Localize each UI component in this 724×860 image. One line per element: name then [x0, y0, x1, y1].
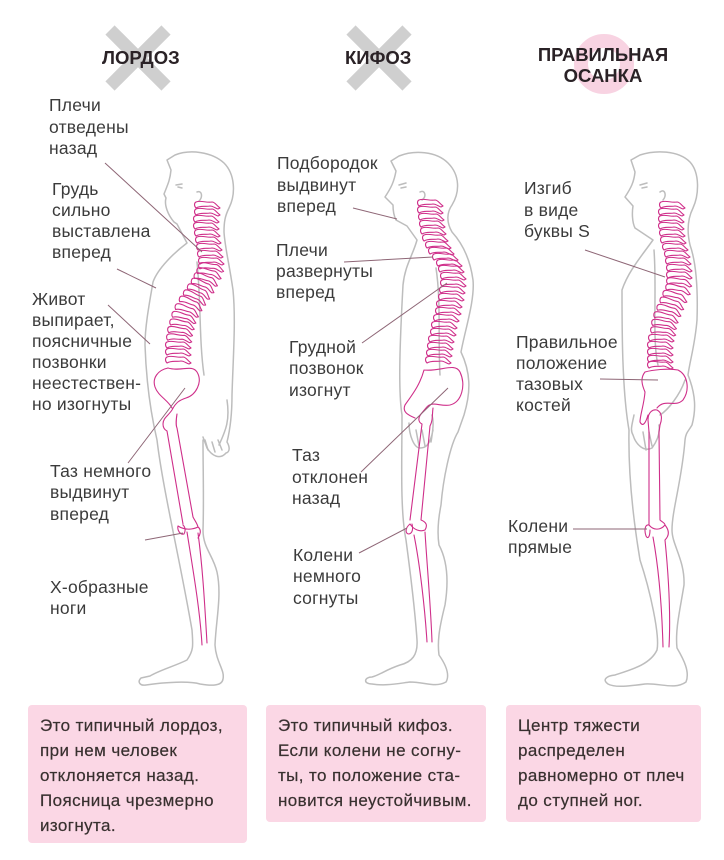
label: shoulders forward: развернуты: [276, 261, 373, 281]
callout: kyphosis: [266, 705, 486, 822]
callout: correct posture: распределен: [518, 741, 625, 760]
leader lines: kyphosis: [344, 208, 448, 553]
body silhouette: kyphosis: [366, 152, 473, 685]
label: pelvis position: положение: [516, 353, 607, 373]
spine: kyphosis: [418, 199, 466, 364]
silhouette details: correct posture face and arm: [631, 183, 685, 450]
label: shoulders forward: вперед: [276, 282, 335, 302]
label: pelvis back: отклонен: [292, 467, 368, 487]
label: S-curve: буквы S: [524, 221, 590, 241]
label: thoracic vertebra: изогнут: [289, 380, 351, 400]
label: belly: Живот: [32, 289, 86, 309]
label: chin forward: Подбородок: [277, 153, 378, 173]
label: pelvis forward: вперед: [50, 504, 109, 524]
label: pelvis position: Правильное: [516, 332, 618, 352]
label: pelvis back: Таз: [292, 445, 320, 465]
label: belly: неестествен-: [32, 373, 141, 393]
panel: kyphosis: [266, 30, 486, 822]
label: pelvis position: тазовых: [516, 374, 583, 394]
label: knees bent: Колени: [293, 545, 353, 565]
leader lines: lordosis: [105, 163, 202, 540]
label: shoulders back: назад: [49, 138, 97, 158]
label: pelvis position: костей: [516, 395, 571, 415]
silhouette details: lordosis face and arm: [176, 184, 222, 452]
callout: lordosis: изогнута.: [40, 816, 116, 835]
label: chest forward: Грудь: [52, 179, 99, 199]
label: chin forward: вперед: [277, 196, 336, 216]
body silhouette: correct posture: [605, 152, 698, 686]
callout: correct posture: равномерно от плеч: [518, 766, 685, 785]
label: pelvis forward: выдвинут: [50, 482, 129, 502]
leader lines: correct posture: [573, 250, 665, 529]
label: shoulders forward: Плечи: [276, 240, 328, 260]
panel: lordosis: [28, 30, 247, 843]
callout: kyphosis: ты, то положение ста-: [278, 766, 460, 785]
label: x-legs: Х-образные: [50, 577, 149, 597]
label: S-curve: Изгиб: [524, 178, 572, 198]
label: belly: позвонки: [32, 352, 107, 372]
spine: lordosis: [166, 201, 224, 364]
callout: lordosis: Поясница чрезмерно: [40, 791, 214, 810]
callout: correct posture: [506, 705, 701, 822]
heading: kyphosis: КИФОЗ: [345, 47, 411, 68]
label: chest forward: выставлена: [52, 221, 151, 241]
label: shoulders back: отведены: [49, 117, 129, 137]
label: S-curve: в виде: [524, 200, 578, 220]
callout: lordosis: отклоняется назад.: [40, 766, 199, 785]
heading: correct posture: ПРАВИЛЬНАЯ: [538, 44, 668, 65]
label: shoulders back: Плечи: [49, 95, 101, 115]
heading: correct posture: ОСАНКА: [564, 65, 642, 86]
heading icon: grey cross: [110, 30, 166, 86]
callout: lordosis: Это типичный лордоз,: [40, 716, 223, 735]
label: pelvis back: назад: [292, 488, 340, 508]
panel: correct posture: [506, 41, 701, 822]
callout: kyphosis: новится неустойчивым.: [278, 791, 472, 810]
pelvis and leg bones: kyphosis: [404, 367, 463, 642]
label: chest forward: сильно: [52, 200, 111, 220]
label: chest forward: вперед: [52, 242, 111, 262]
label: knees straight: Колени: [508, 516, 568, 536]
callout: lordosis: при нем человек: [40, 741, 177, 760]
spine: correct posture: [648, 201, 692, 369]
label: knees bent: немного: [293, 566, 361, 586]
label: belly: но изогнуты: [32, 394, 131, 414]
label: thoracic vertebra: позвонок: [289, 358, 364, 378]
label: chin forward: выдвинут: [277, 175, 356, 195]
heading icon: pink ring: [581, 41, 627, 87]
label: knees straight: прямые: [508, 537, 572, 557]
callout: correct posture: Центр тяжести: [518, 716, 640, 735]
pelvis and leg bones: correct posture: [640, 369, 687, 647]
pelvis and leg bones: lordosis: [154, 368, 207, 645]
label: thoracic vertebra: Грудной: [289, 337, 356, 357]
callout: correct posture: до ступней ног.: [518, 791, 643, 810]
callout: lordosis: [28, 705, 247, 843]
callout: kyphosis: Это типичный кифоз.: [278, 716, 453, 735]
callout: kyphosis: Если колени не согну-: [278, 741, 461, 760]
silhouette details: kyphosis face and arm: [399, 183, 440, 448]
label: x-legs: ноги: [50, 598, 86, 618]
heading icon: grey cross: [351, 30, 407, 86]
label: belly: поясничные: [32, 331, 132, 351]
body silhouette: lordosis: [139, 152, 234, 685]
label: knees bent: согнуты: [293, 588, 359, 608]
label: pelvis forward: Таз немного: [50, 461, 151, 481]
heading: lordosis: ЛОРДОЗ: [102, 47, 180, 68]
label: belly: выпирает,: [32, 310, 115, 330]
